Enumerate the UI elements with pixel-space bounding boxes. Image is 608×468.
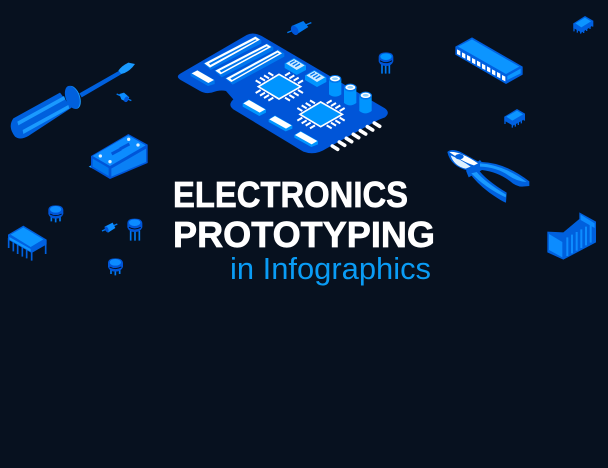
icon: pliers	[447, 150, 529, 203]
title line one: ELECTRONICS	[173, 174, 408, 215]
board body	[178, 34, 388, 153]
icon: USB module	[89, 134, 148, 179]
microchip 2	[297, 100, 345, 128]
icon: transistor left 3	[108, 258, 123, 275]
icon: transistor left 1	[48, 205, 63, 222]
edge connector pins	[332, 123, 380, 149]
capacitors	[329, 75, 372, 113]
icon: heat sink	[547, 212, 596, 260]
circuit board illustration	[178, 34, 388, 153]
icon: resistor top	[287, 21, 311, 36]
icon: small chip center right	[504, 109, 525, 128]
title line two: PROTOTYPING	[173, 214, 435, 255]
icon: DIP chip left	[8, 226, 47, 261]
icon: pin header chip	[455, 37, 523, 84]
icon: small resistor middle	[102, 223, 117, 233]
icon: screwdriver	[11, 63, 135, 139]
icon: transistor left 2	[127, 219, 142, 241]
small ICs on board	[285, 58, 326, 87]
icon: small chip top right	[573, 16, 593, 34]
subtitle: in Infographics	[230, 251, 431, 286]
icon: transistor top	[379, 52, 393, 74]
microchip 1	[256, 73, 303, 101]
small pads	[191, 70, 318, 147]
header slots	[203, 36, 284, 85]
icon: small resistor left	[117, 93, 131, 103]
